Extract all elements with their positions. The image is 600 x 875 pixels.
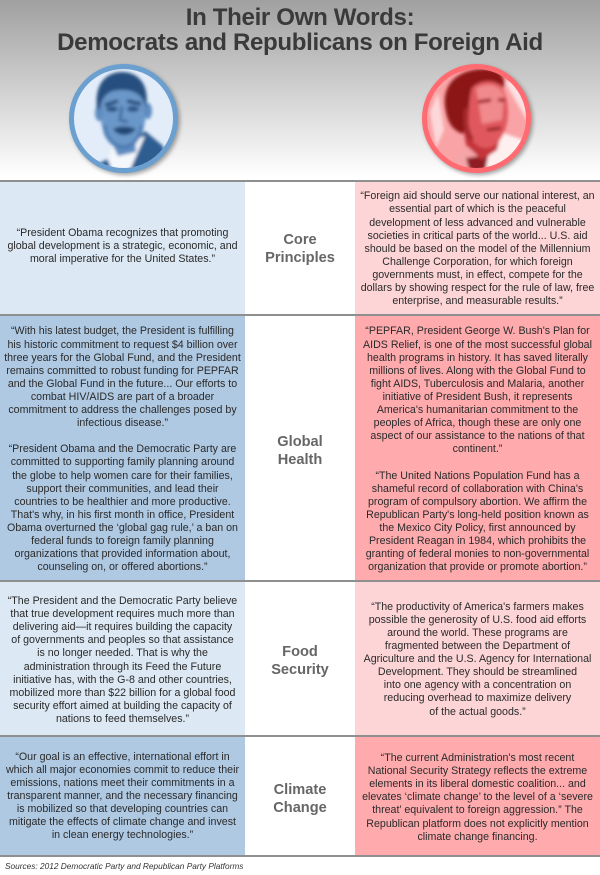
quote: food security, Republicans: fragmented between the Department of	[385, 640, 570, 652]
quote: global health, Democrats: infectious disease.”	[77, 417, 168, 429]
quote: climate change, Republicans: elements in its liberal domestic coalition... and	[369, 778, 586, 790]
quote: food security, Republicans: possible the generosity of U.S. food aid efforts	[369, 614, 586, 626]
quote: food security, Democrats: security effort aimed at building the capacity of	[13, 700, 232, 712]
quote: global health, Republicans: continent.”	[453, 443, 502, 455]
quote: food security, Republicans: into one agency with a concentration on	[384, 679, 571, 691]
quote: core principles, Republicans: governments must, in effect, compete for the	[372, 269, 583, 281]
category label: Food Security: Security	[271, 662, 329, 678]
quote: food security, Republicans: around the world. These programs are	[387, 627, 568, 639]
panel: food security, Republicans	[355, 581, 600, 736]
quote: core principles, Democrats: global development is a strategic, economic, and	[7, 240, 238, 252]
category label: Global Health: Global	[277, 434, 323, 450]
quote: global health, Democrats: three years for the Global Fund, and the President	[4, 352, 241, 364]
quote: core principles, Republicans: essential part of which is the peaceful	[389, 203, 566, 215]
panel: global health, Republicans	[355, 314, 600, 582]
quote: global health, Republicans: millions of lives. Along with the Global Fund to	[369, 365, 586, 377]
panel: core principles, Democrats	[0, 181, 245, 315]
quote: food security, Democrats: initiative has, with the G-8 and other countries,	[13, 674, 232, 686]
quote: global health, Democrats: the globe to help women care for their families,	[12, 470, 233, 482]
quote: global health, Democrats: remains committed to robust funding for PEPFAR	[6, 365, 239, 377]
quote: core principles, Democrats: “President Obama recognizes that promoting	[17, 227, 228, 239]
panel: global health, Democrats	[0, 314, 245, 582]
category label: Core Principles: Core	[283, 232, 317, 248]
quote: core principles, Republicans: societies in critical parts of the world... U.S. aid	[368, 230, 588, 242]
quote: global health, Democrats: counseling on, or offered abortions.”	[37, 561, 208, 573]
quote: global health, Republicans: Republican Party's long-held position known as	[366, 509, 589, 521]
quote: climate change, Democrats: transparent manner, and the necessary financing	[7, 790, 238, 802]
quote: global health, Democrats	[4, 325, 241, 573]
category label: Climate Change: Climate	[274, 782, 326, 798]
quote: global health, Republicans: aspect of our assistance to the nations of that	[370, 430, 585, 442]
quote: global health, Democrats: support their communities, and lead their	[26, 483, 219, 495]
quote: food security, Democrats: of governments and peoples so that assistance	[11, 634, 234, 646]
quote: global health, Republicans: AIDS Relief, is one of the most successful global	[363, 339, 592, 351]
panel: food security, Democrats	[0, 581, 245, 736]
quote: core principles, Republicans: should be based on the model of the Millennium	[365, 243, 590, 255]
quote: food security, Democrats: delivering aid—it requires building the capacity	[13, 621, 232, 633]
quote: climate change, Republicans: climate change financing.	[417, 831, 538, 843]
quote: food security, Democrats	[8, 595, 237, 725]
quote: core principles, Republicans: development of less advanced and vulnerable	[369, 217, 586, 229]
quote: global health, Democrats: combat HIV/AIDS are part of a broader	[31, 391, 214, 403]
panel: climate change, Democrats	[0, 735, 245, 856]
quote: global health, Democrats: “With his latest budget, the President is fulfilling	[11, 325, 234, 337]
category label: Food Security: Food	[282, 644, 318, 660]
quote: global health, Republicans: granting of federal monies to non-governmental	[366, 548, 589, 560]
quote: core principles, Democrats: moral imperative for the United States.”	[30, 253, 215, 265]
quote: global health, Republicans: President Reagan in 1984, which prohibits the	[369, 535, 586, 547]
quote: climate change, Democrats: is mobilized so that developing countries can	[17, 803, 228, 815]
quote: core principles, Democrats	[7, 227, 238, 265]
quote: global health, Republicans: “PEPFAR, President George W. Bush's Plan for	[365, 325, 590, 337]
quote: food security, Republicans: reducing overhead to maximize delivery	[384, 692, 571, 704]
source note: Sources: 2012 Democratic Party and Republican Party Platforms	[5, 861, 243, 871]
quote: global health, Republicans: the Mexico City Policy, first announced by	[379, 522, 576, 534]
quote: global health, Democrats: That's why, in his first month in office, President	[11, 509, 234, 521]
quote: climate change, Republicans: “The current Administration's most recent	[381, 752, 574, 764]
quote: core principles, Republicans: Challenge Corporation, for which foreign	[382, 256, 573, 268]
portrait: Democrat candidate	[68, 64, 182, 178]
title	[57, 4, 543, 56]
title: In Their Own Words:	[186, 4, 414, 31]
quote: food security, Democrats: “The President and the Democratic Party believe	[8, 595, 237, 607]
quote: global health, Republicans: organization that provide or promote abortion.”	[368, 561, 587, 573]
quote: global health, Republicans: health programs in history. It has saved literally	[367, 352, 588, 364]
title: Democrats and Republicans on Foreign Aid	[57, 29, 543, 56]
quote: core principles, Republicans: “Foreign aid should serve our national interest, an	[360, 190, 595, 202]
quote: core principles, Republicans	[360, 190, 595, 307]
quote: global health, Republicans: fight AIDS, Tuberculosis and Malaria, another	[371, 378, 584, 390]
quote: climate change, Democrats: “Our goal is an effective, international effort in	[15, 751, 230, 763]
quote: global health, Democrats: Obama overturned the ‘global gag rule,’ a ban on	[7, 522, 238, 534]
quote: global health, Republicans: program of compulsory abortion. We affirm the	[368, 496, 587, 508]
category label: Climate Change	[273, 782, 327, 816]
quote: climate change, Republicans: National Security Strategy reflects the extreme	[368, 765, 587, 777]
portrait: Republican candidate	[422, 64, 536, 178]
quote: food security, Republicans	[364, 601, 591, 718]
quote: global health, Democrats: federal funds to foreign family planning	[31, 535, 214, 547]
quote: climate change, Democrats: in clean energy technologies.”	[52, 829, 193, 841]
quote: core principles, Republicans: dollars by showing respect for the rule of law, free	[361, 282, 594, 294]
quote: food security, Republicans: Development. They should be streamlined	[378, 666, 577, 678]
quote: climate change, Democrats: mitigate the effects of climate change and invest	[9, 816, 236, 828]
category label: Core Principles: Principles	[265, 250, 335, 266]
quote: climate change, Republicans	[362, 752, 593, 843]
quote: global health, Democrats: organizations that provided information about,	[15, 548, 230, 560]
quote: global health, Democrats: committed to supporting family planning around	[11, 456, 234, 468]
panel: core principles, Republicans	[355, 181, 600, 315]
category label: Global Health: Health	[278, 452, 322, 468]
quote: global health, Republicans: “The United Nations Population Fund has a	[375, 470, 580, 482]
category label: Core Principles	[265, 232, 335, 266]
quote: food security, Democrats: administration through its Feed the Future	[24, 661, 221, 673]
quote: climate change, Democrats	[6, 751, 239, 841]
quote: global health, Democrats: commitment to address the challenges posed by	[8, 404, 237, 416]
category label: Food Security	[271, 644, 329, 678]
quote: climate change, Democrats: emissions, nations meet their commitments in a	[10, 777, 235, 789]
quote: global health, Republicans: initiative of President Bush, it represents	[383, 391, 572, 403]
category label: Global Health	[277, 434, 323, 468]
quote: food security, Republicans: “The productivity of America's farmers makes	[371, 601, 584, 613]
panel: climate change, Republicans	[355, 735, 600, 856]
quote: food security, Democrats: nations to feed themselves.”	[56, 713, 189, 725]
quote: global health, Republicans: peoples of Africa, though these are only one	[374, 417, 581, 429]
quote: global health, Republicans: America's humanitarian commitment to the	[377, 404, 578, 416]
category label: Climate Change: Change	[273, 800, 327, 816]
quote: climate change, Republicans: threat’ equivalent to foreign aggression.” The	[372, 804, 583, 816]
quote: food security, Democrats: is no longer needed. That is why the	[37, 647, 208, 659]
quote: global health, Republicans: shameful record of collaboration with China's	[372, 483, 583, 495]
quote: global health, Democrats: countries to be healthier and more productive.	[14, 496, 231, 508]
quote: food security, Democrats: mobilized more than $22 billion for a global food	[10, 687, 235, 699]
header background	[0, 0, 600, 180]
quote: food security, Democrats: that true development requires much more than	[10, 608, 235, 620]
quote: climate change, Republicans: elevates ‘climate change’ to the level of a ‘severe	[362, 791, 593, 803]
quote: global health, Democrats: “President Obama and the Democratic Party are	[9, 443, 236, 455]
quote: climate change, Republicans: Republican platform does not explicitly mention	[366, 818, 589, 830]
quote: food security, Republicans: of the actual goods.”	[429, 706, 526, 718]
quote: food security, Republicans: Agriculture and the U.S. Agency for International	[364, 653, 591, 665]
quote: global health, Democrats: his historic commitment to request $4 billion over	[7, 339, 238, 351]
quote: climate change, Democrats: which all major economies commit to reduce their	[6, 764, 239, 776]
quote: global health, Democrats: and the Global Fund in the future... Our efforts to	[8, 378, 237, 390]
quote: core principles, Republicans: enterprise, and measurable results.”	[392, 295, 563, 307]
quote: global health, Republicans	[363, 325, 592, 573]
